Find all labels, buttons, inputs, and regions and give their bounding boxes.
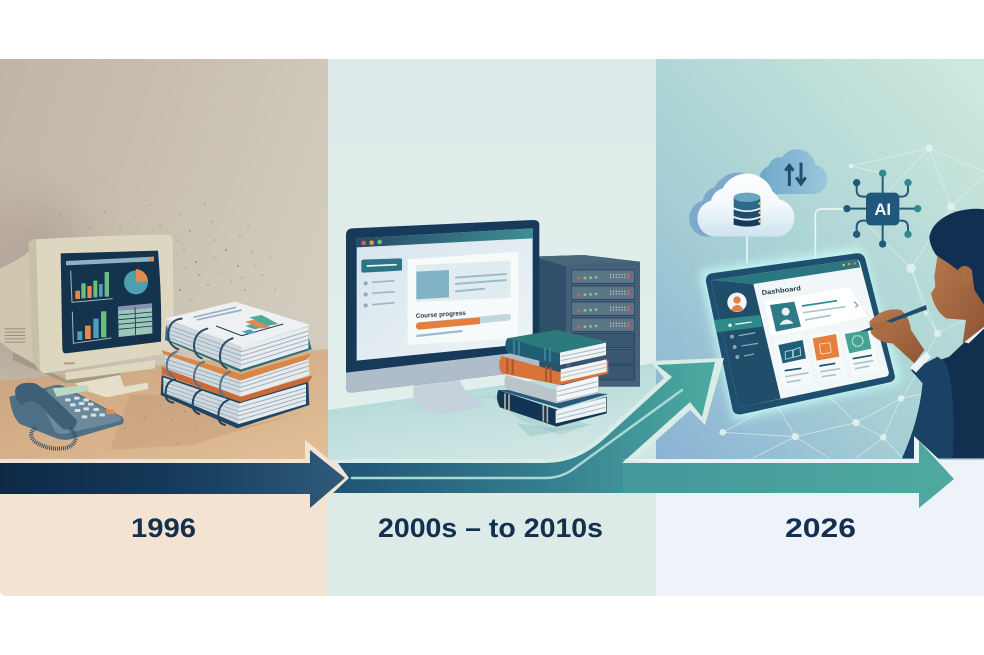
orange book <box>499 356 608 385</box>
desk <box>328 363 656 460</box>
middle binder <box>161 350 313 402</box>
arrow: 2026 segment <box>622 436 960 515</box>
text: course progress: Course progress <box>416 310 466 320</box>
icon: tablet dashboard <box>701 248 901 420</box>
bottom binder <box>161 375 309 428</box>
icon: cloud with up/down arrows <box>759 149 827 195</box>
arrow: 1996 segment <box>0 440 352 516</box>
binder rings <box>166 319 233 425</box>
icon: CRT computer <box>0 235 174 397</box>
panel: 1996 <box>0 59 328 596</box>
icon: cloud with database <box>689 173 794 237</box>
icon: desktop monitor <box>346 220 539 415</box>
shadow under books <box>110 395 312 450</box>
text: dashboard: Dashboard <box>761 285 801 297</box>
desk speckles <box>124 404 196 444</box>
icon: AI chip: AI <box>874 200 891 219</box>
navy book <box>497 390 608 427</box>
icon: AI chip <box>843 170 921 248</box>
label: 2000s to 2010s: 2000s – to 2010s <box>378 513 603 543</box>
icon: stack of books <box>497 330 608 437</box>
network of nodes <box>719 145 984 458</box>
grey book <box>504 375 599 403</box>
icon: server rack <box>533 255 640 387</box>
icon: stack of binders <box>161 302 313 428</box>
teal book <box>505 330 607 366</box>
illustration: person with stylus <box>859 209 984 458</box>
panel: 2026 <box>656 59 984 596</box>
label: 1996: 1996 <box>131 513 196 543</box>
connector lines <box>747 209 846 263</box>
arrow: curved growth arrow <box>333 358 724 497</box>
panel: 2000s to 2010s <box>328 59 656 596</box>
top binder <box>165 302 312 372</box>
icon: telephone <box>9 383 124 449</box>
wall speckles <box>27 199 284 301</box>
desk <box>0 349 328 460</box>
label: 2026: 2026 <box>785 513 856 543</box>
